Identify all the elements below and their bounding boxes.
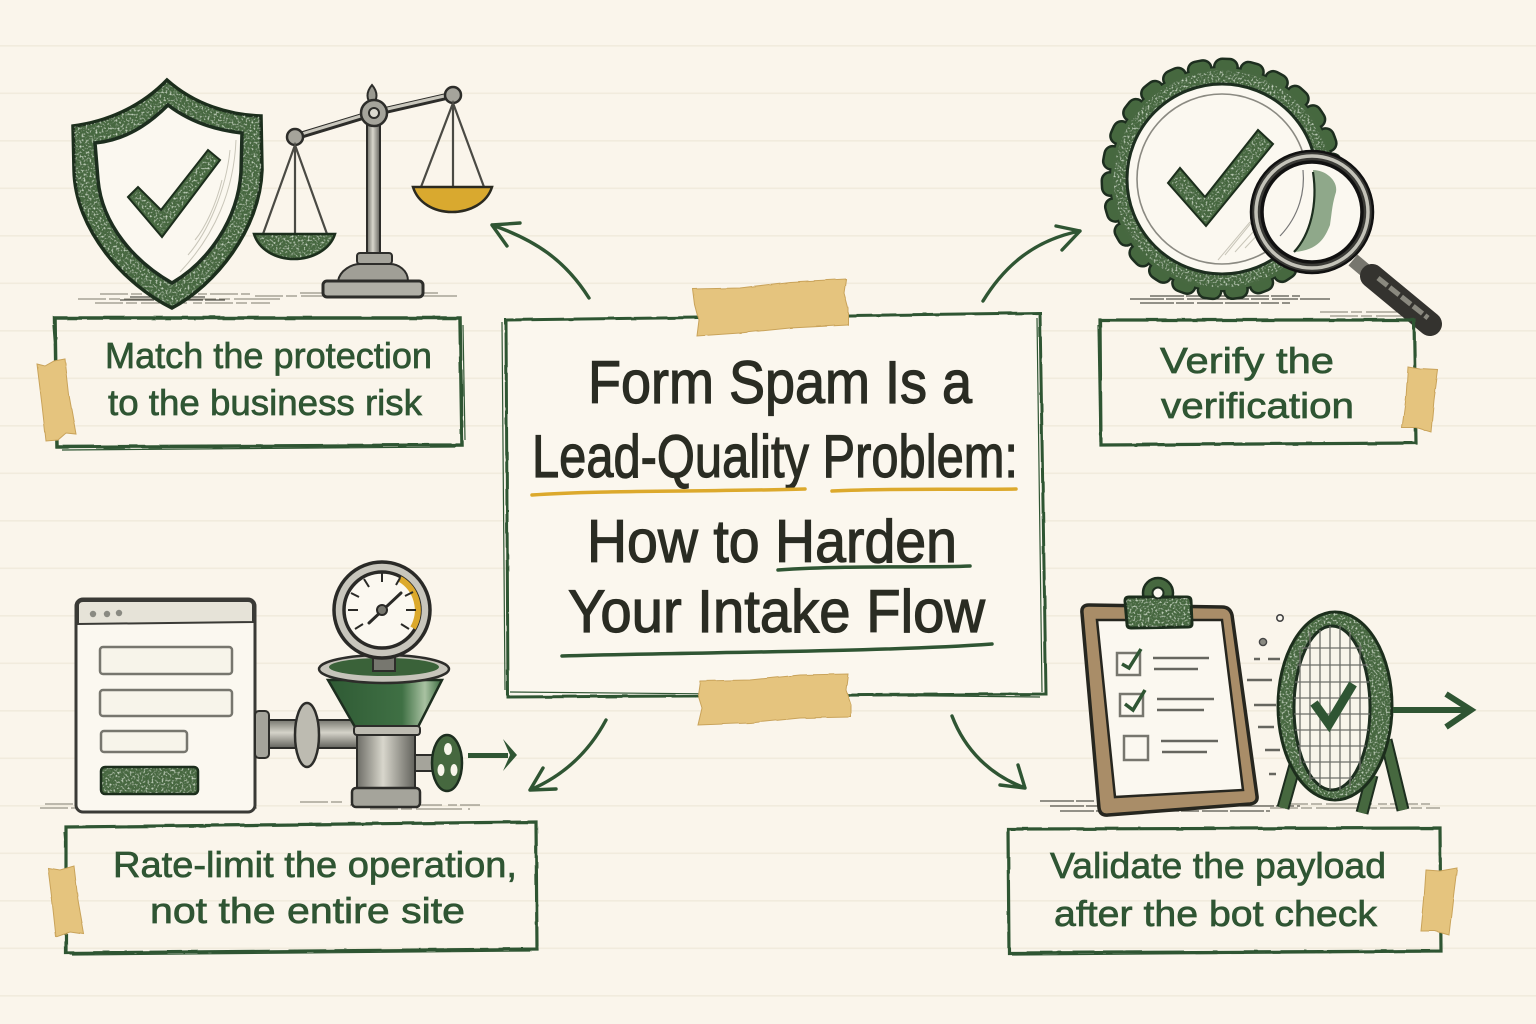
illustration: filter hoop with mesh and check [1247, 612, 1471, 813]
text: validate the payload: Validate the payload [1050, 845, 1386, 886]
icon: checkbox three [1124, 736, 1148, 760]
tape: match box [37, 359, 76, 441]
label box: match the protection [37, 318, 465, 450]
tape: verify box [1402, 367, 1438, 432]
title text: How to Harden [587, 508, 957, 575]
icon: gold scale pan [413, 187, 492, 212]
icon: magnifying glass [1251, 151, 1430, 324]
text: validate the payload: after the bot check [1054, 893, 1378, 934]
form submit button [101, 767, 198, 794]
title text: Lead-Quality Problem: [532, 423, 1018, 490]
tape: validate box [1421, 868, 1457, 935]
icon: checkbox one [1117, 649, 1141, 675]
text: match the protection: to the business risk [108, 382, 423, 423]
arrow: center to top right [983, 226, 1080, 301]
gold underline [532, 489, 1016, 495]
illustration: shield with checkmark [73, 80, 280, 308]
icon: pressure gauge [334, 562, 430, 658]
label box: rate-limit [48, 822, 537, 955]
icon: valve wheel [415, 735, 462, 791]
arrow: center to bottom right [952, 716, 1025, 788]
arrow: center to bottom left [530, 720, 606, 790]
icon: seal check [1168, 130, 1273, 226]
text: verify the verification: verification [1161, 385, 1354, 426]
illustration: pipe, pressure gauge, funnel and valve [255, 562, 517, 807]
icon: shield check [128, 150, 220, 237]
illustration: web form window [40, 599, 480, 812]
icon: checkbox two [1120, 690, 1145, 716]
panel: central title card [502, 279, 1046, 725]
arrow: pipe output [468, 739, 517, 771]
green underlines [562, 566, 992, 656]
arrow: hoop output [1393, 694, 1471, 727]
title text: Your Intake Flow [568, 578, 986, 645]
tape: title top [693, 279, 848, 336]
icon: hoop check [1314, 684, 1353, 724]
text: match the protection: Match the protection [105, 335, 432, 376]
label box: validate the payload [1008, 828, 1457, 955]
illustration: verification seal with magnifier [1109, 66, 1430, 324]
label box: verify the verification [1098, 320, 1438, 445]
text: rate-limit the operation: not the entire site [150, 890, 465, 931]
text: rate-limit the operation: Rate-limit the operation, [113, 844, 517, 885]
tape: title bottom [698, 674, 851, 725]
illustration: clipboard checklist [1040, 578, 1300, 815]
icon: clipboard clip [1125, 578, 1192, 628]
icon: green scale pan [254, 234, 335, 259]
illustration: balance scale [254, 85, 492, 297]
title text: Form Spam Is a [588, 349, 973, 416]
tape: rate-limit box [48, 866, 84, 937]
arrow: center to top left [492, 223, 589, 298]
text: verify the verification: Verify the [1160, 340, 1334, 381]
